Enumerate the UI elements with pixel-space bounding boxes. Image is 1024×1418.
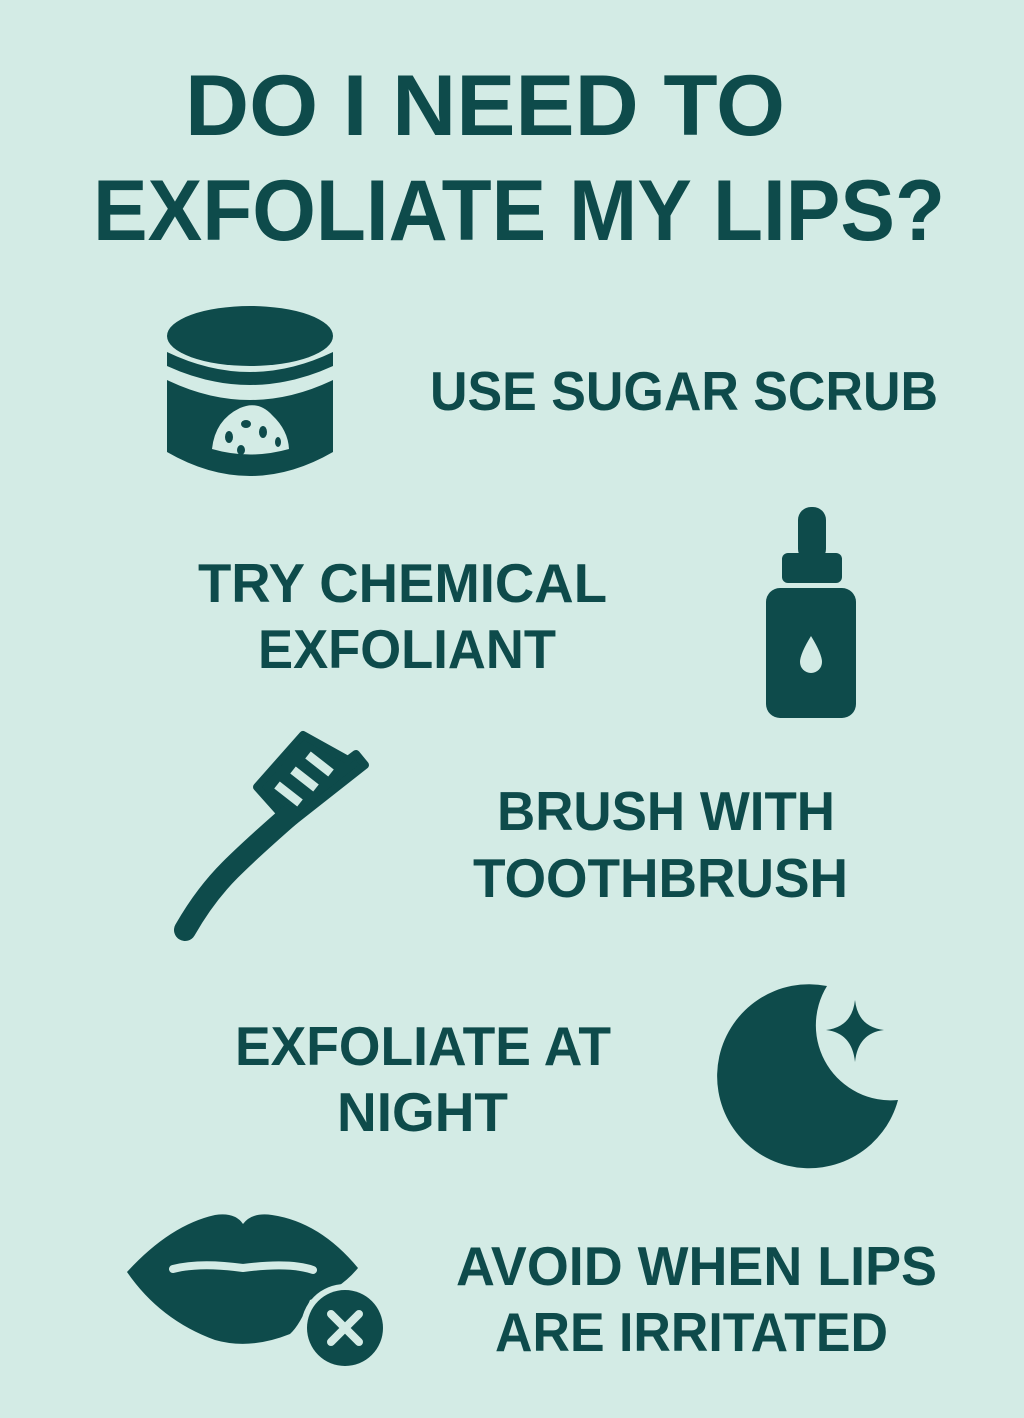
text: avoid when lips are irritated: ARE IRRITATED bbox=[495, 1301, 888, 1363]
icon: dropper bottle bbox=[766, 507, 856, 718]
text: avoid when lips are irritated bbox=[456, 1235, 937, 1363]
text: brush with toothbrush: BRUSH WITH bbox=[497, 780, 835, 842]
text: exfoliate at night: EXFOLIATE AT bbox=[235, 1015, 611, 1077]
icon: moon and star bbox=[717, 984, 898, 1168]
title: EXFOLIATE MY LIPS? bbox=[93, 163, 945, 259]
text: use sugar scrub: USE SUGAR SCRUB bbox=[430, 360, 938, 422]
text: avoid when lips are irritated: AVOID WHEN LIPS bbox=[456, 1235, 937, 1297]
title bbox=[93, 58, 945, 259]
icon: toothbrush bbox=[185, 735, 365, 930]
text: brush with toothbrush bbox=[473, 780, 848, 909]
icon: sugar scrub jar bbox=[167, 306, 333, 476]
title: DO I NEED TO bbox=[185, 58, 785, 154]
text: try chemical exfoliant: TRY CHEMICAL bbox=[198, 552, 607, 614]
text: brush with toothbrush: TOOTHBRUSH bbox=[473, 847, 848, 909]
text: try chemical exfoliant bbox=[198, 552, 607, 680]
icon: lips with cross bbox=[127, 1214, 389, 1372]
text: exfoliate at night: NIGHT bbox=[337, 1081, 508, 1143]
text: exfoliate at night bbox=[235, 1015, 611, 1143]
text: try chemical exfoliant: EXFOLIANT bbox=[258, 618, 556, 680]
